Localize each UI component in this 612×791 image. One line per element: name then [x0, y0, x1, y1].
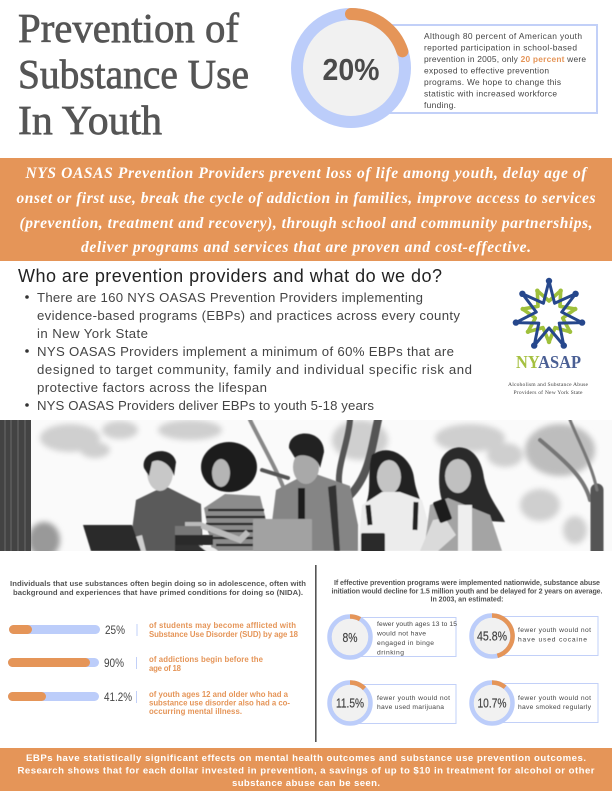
right section heading: If effective prevention programs were implemented nationwide, substance abuse	[334, 579, 600, 587]
bullet list: designed to target community, family and individual specific risk and	[37, 362, 472, 377]
laptop 1	[83, 525, 141, 551]
photo: five students with laptops and phones	[0, 420, 612, 562]
stat: 10.7 percent: have smoked regularly	[518, 704, 592, 711]
stat: 45.8 percent	[472, 615, 598, 656]
callout: 20 percent statistic: programs. We hope to change this	[424, 77, 561, 87]
footer banner: EBPs have statistically significant effects on mental health outcomes and substance use prevention outcomes.	[26, 753, 586, 764]
title: Substance Use	[18, 51, 249, 97]
bar: 25 percent	[9, 621, 299, 639]
bar: 25 percent: Substance Use Disorder (SUD) by age 18	[149, 630, 299, 639]
bar: 41.2 percent: 41.2%	[104, 690, 132, 704]
banner: mission statement: NYS OASAS Prevention Providers prevent loss of life among youth, delay age of	[24, 165, 588, 182]
bar: 90 percent: age of 18	[149, 664, 182, 673]
callout: 20 percent statistic	[297, 14, 597, 122]
logo: NYASAP: Providers of New York State	[514, 389, 583, 396]
bullet list: in New York State	[37, 326, 148, 341]
logo: NYASAP: NYASAP	[516, 352, 581, 372]
stat: 45.8 percent: have used cocaine	[518, 636, 587, 644]
right section heading: initiation would decline for 1.5 million youth and be delayed for 2 years on average.	[332, 588, 603, 596]
stat: 11.5 percent: 11.5%	[336, 696, 364, 710]
right section heading	[332, 579, 603, 604]
banner: mission statement: deliver programs and services that are proven and cost-effective.	[81, 239, 531, 256]
footer banner	[0, 748, 612, 791]
right section heading: In 2003, an estimated:	[430, 596, 504, 604]
banner: mission statement: onset or first use, break the cycle of addiction in families, improve access to services	[16, 190, 596, 207]
callout: 20 percent statistic: exposed to effective prevention	[424, 66, 549, 76]
tree trunk	[0, 420, 31, 551]
laptop 2	[253, 519, 312, 552]
stat: 8 percent: would not have	[376, 630, 426, 638]
bullet list: NYS OASAS Providers implement a minimum of 60% EBPs that are	[37, 344, 454, 359]
bullet list: There are 160 NYS OASAS Prevention Providers implementing	[37, 290, 423, 305]
title	[18, 5, 249, 143]
left section heading	[10, 579, 306, 597]
logo: NYASAP	[508, 278, 589, 396]
stat: 8 percent	[330, 616, 457, 658]
stat: 45.8 percent: 45.8%	[477, 630, 507, 644]
bullet list: evidence-based programs (EBPs) and practices across every county	[37, 308, 460, 323]
bar: 25 percent: 25%	[105, 623, 125, 637]
bar: 41.2 percent	[8, 690, 290, 716]
stat: 11.5 percent: have used marijuana	[377, 704, 444, 711]
bullet list: protective factors across the lifespan	[37, 380, 267, 395]
stat: 45.8 percent: fewer youth would not	[518, 627, 591, 634]
callout: 20 percent statistic: statistic with increased workforce	[424, 88, 557, 98]
bar: 41.2 percent: of youth ages 12 and older who had a	[149, 690, 289, 699]
stat: 11.5 percent	[330, 682, 456, 724]
bar: 41.2 percent: occurring mental illness.	[149, 707, 242, 716]
stat: 8 percent: fewer youth ages 13 to 15	[377, 621, 457, 628]
person 1	[131, 451, 203, 551]
left section heading: Individuals that use substances often begin doing so in adolescence, often with	[10, 579, 306, 588]
bar: 25 percent: of students may become afflicted with	[149, 621, 296, 630]
callout: 20 percent statistic: 20%	[322, 52, 380, 87]
section divider	[315, 565, 317, 742]
callout: 20 percent statistic: reported participation in school-based	[424, 42, 577, 52]
callout: 20 percent statistic: funding.	[424, 100, 456, 110]
logo: NYASAP: Alcoholism and Substance Abuse	[508, 382, 589, 388]
callout: 20 percent statistic: Although 80 percent of American youth	[424, 31, 582, 41]
books	[174, 526, 214, 551]
stat: 8 percent: 8%	[342, 631, 358, 645]
heading: who are prevention providers: Who are prevention providers and what do we do?	[18, 266, 442, 286]
bullet list: NYS OASAS Providers deliver EBPs to youth 5-18 years	[37, 398, 374, 413]
stat: 10.7 percent: fewer youth would not	[518, 695, 591, 702]
footer banner: substance abuse can be seen.	[232, 778, 380, 789]
bullet list	[25, 290, 472, 413]
person 3	[271, 433, 358, 551]
stat: 8 percent: engaged in binge	[377, 640, 434, 647]
banner: mission statement: (prevention, treatment and recovery), through school and community partnerships,	[20, 215, 592, 232]
person 5	[420, 447, 505, 551]
person 2	[182, 442, 266, 551]
person 4	[358, 449, 428, 551]
banner: mission statement	[0, 158, 612, 261]
stat: 8 percent: drinking	[377, 650, 404, 656]
stat: 10.7 percent: 10.7%	[478, 696, 506, 710]
callout: 20 percent statistic: prevention in 2005, only 20 percent were	[424, 54, 586, 64]
bar: 90 percent: of addictions begin before the	[149, 655, 264, 664]
title: In Youth	[18, 97, 162, 143]
bar: 90 percent: 90%	[104, 656, 124, 670]
bar: 41.2 percent: substance use disorder also had a co-	[149, 698, 290, 708]
footer banner: Research shows that for each dollar invested in prevention, a savings of up to $10 in treatment for alcohol or other	[18, 766, 595, 776]
title: Prevention of	[18, 5, 239, 51]
stat: 10.7 percent	[472, 682, 598, 724]
left section heading: background and experiences that have primed conditions for doing so (NIDA).	[13, 588, 303, 597]
bar: 90 percent	[8, 655, 264, 673]
stat: 11.5 percent: fewer youth would not	[377, 695, 450, 702]
